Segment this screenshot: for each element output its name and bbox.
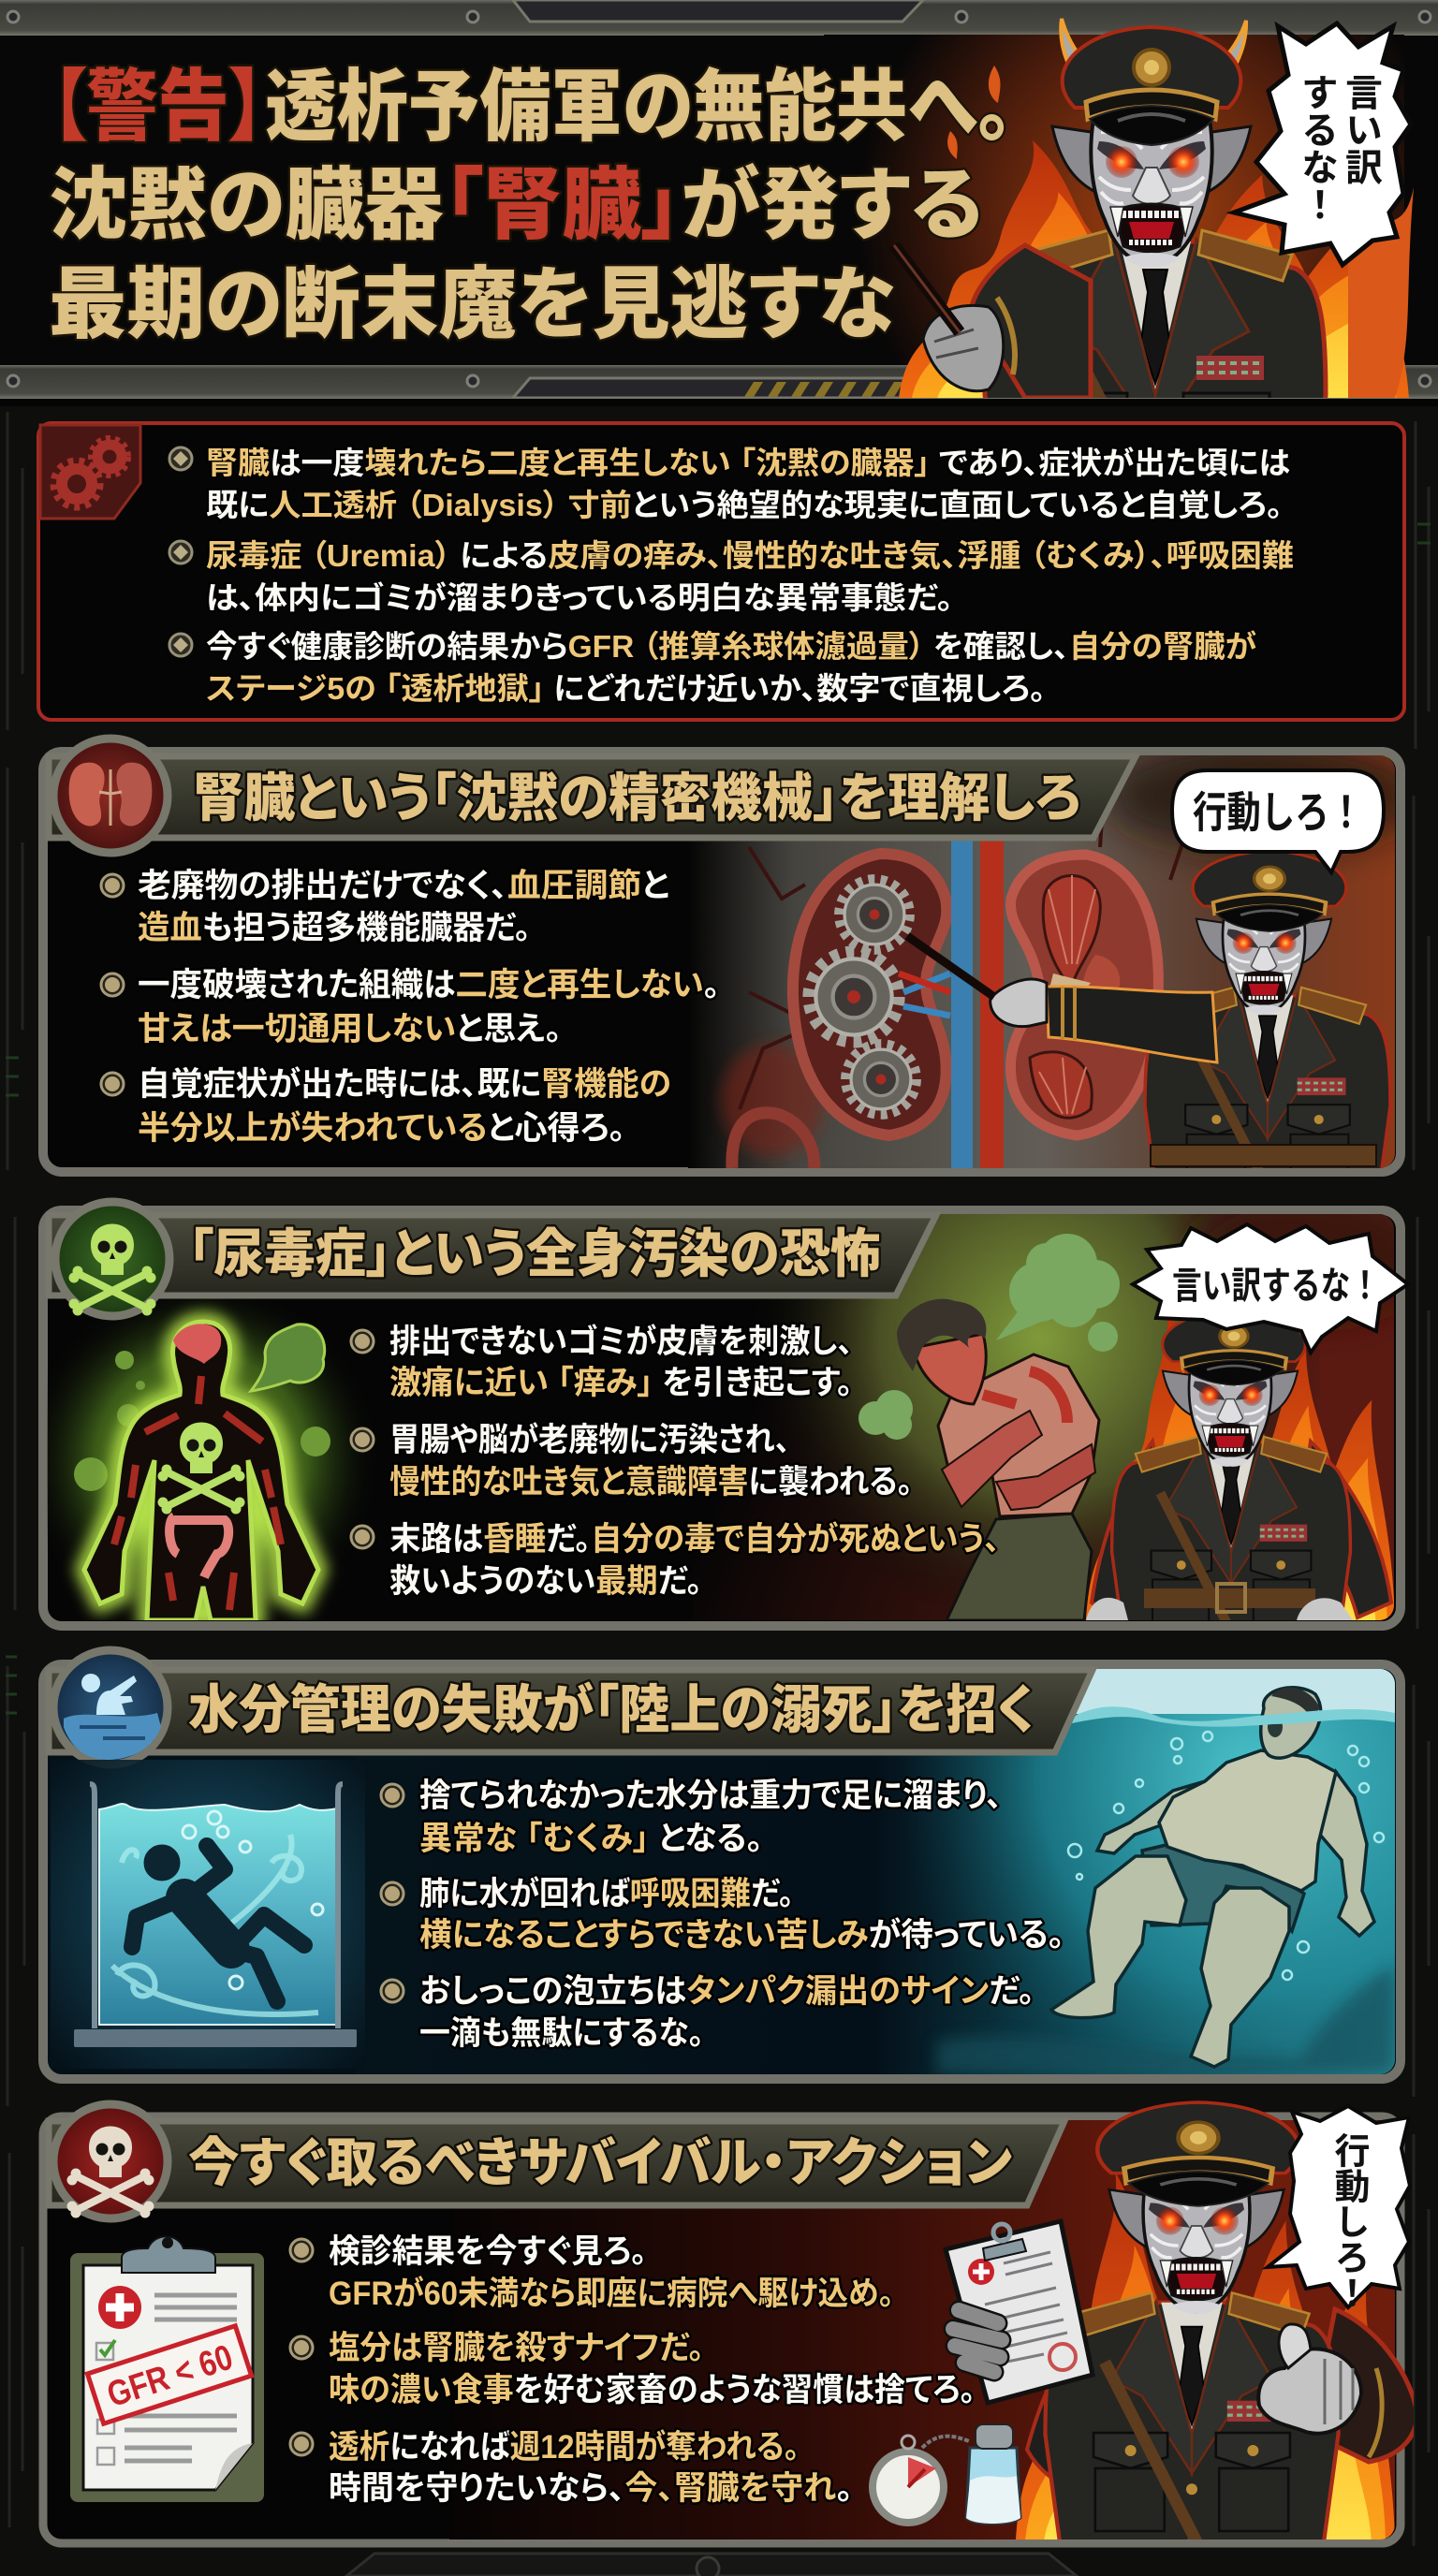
speech burst vertical <box>1268 2106 1410 2310</box>
bullets section 4: 透析になれば週12時間が奪われる。 <box>329 2429 800 2466</box>
bullets section 1: 自覚症状が出た時には、既に腎機能の <box>138 1066 671 1103</box>
speech burst: するな！ <box>1296 73 1337 223</box>
bullets section 4: GFRが60未満なら即座に病院へ駆け込め。 <box>329 2276 894 2312</box>
header title: 最期の断末魔を見逃すな <box>49 260 895 348</box>
bullet text 2 <box>169 538 1294 615</box>
officer body <box>1024 2291 1414 2539</box>
bullets section 3: おしっこの泡立ちはタンパク漏出のサインだ。 <box>419 1973 1034 2010</box>
header title <box>49 63 1013 348</box>
bullets section 2: 慢性的な吐き気と意識障害に襲われる。 <box>389 1464 913 1500</box>
speech bubble <box>1172 770 1384 872</box>
bullets section 4: 味の濃い食事を好む家畜のような習慣は捨てろ。 <box>329 2372 976 2408</box>
illustration: clipboard with GFR stamp <box>70 2236 264 2502</box>
bullet text 2: 尿毒症 （Uremia） による皮膚の痒み、慢性的な吐き気、浮腫 （むくみ）、呼吸困難 <box>206 538 1294 573</box>
header band: 「尿毒症」という全身汚染の恐怖 <box>188 1224 881 1283</box>
bullets section 3: 異常な 「むくみ」 となる。 <box>419 1821 763 1857</box>
panel: summary warning <box>38 423 1404 720</box>
pipes <box>951 840 1004 1168</box>
icon: red skull <box>53 2104 168 2218</box>
illustration: broken kidney machine <box>688 739 1423 1168</box>
bullets section 1 <box>101 868 720 1147</box>
speech burst: 言い訳するな！ <box>1172 1266 1380 1307</box>
illustration: toxic body <box>74 1322 330 1620</box>
head <box>1097 2102 1299 2313</box>
bullets section 2: 激痛に近い 「痒み」 を引き起こす。 <box>389 1365 853 1401</box>
bullet text 1 <box>169 446 1290 522</box>
bottom metal bar <box>0 365 1438 406</box>
bullets section 1: 甘えは一切通用しないと思え。 <box>138 1011 562 1047</box>
speech bubble: 行動しろ！ <box>1193 788 1363 837</box>
panel: section 2 uremia <box>38 1198 1405 1631</box>
bullet text 2: は、体内にゴミが溜まりきっている明白な異常事態だ。 <box>206 580 953 615</box>
icon: gears tab <box>40 425 140 519</box>
head <box>1052 27 1251 267</box>
header band: 水分管理の失敗が「陸上の溺死」を招く <box>188 1680 1034 1739</box>
icon: swimmer <box>53 1650 168 1764</box>
bullet text 3: ステージ5の 「透析地獄」 にどれだけ近いか、数字で直視しろ。 <box>206 671 1046 706</box>
pointing fist <box>1258 2324 1361 2434</box>
icon: stopwatch <box>873 2436 969 2523</box>
bullets section 3: 横になることすらできない苦しみが待っている。 <box>419 1917 1064 1954</box>
officer with clipboard <box>946 2102 1417 2576</box>
illustration: drowning man <box>899 1669 1395 2074</box>
torso <box>983 228 1328 398</box>
header banner <box>0 0 1438 406</box>
header band <box>49 2121 1064 2205</box>
officer with baton <box>904 854 1392 1168</box>
icon: kidneys <box>53 739 168 853</box>
kidney left with gears <box>793 854 950 1135</box>
illustration background <box>47 1189 1432 1620</box>
illustration: water tank <box>51 1760 365 2069</box>
toxic smoke <box>858 1234 1120 1440</box>
bullets section 4 <box>290 2233 976 2507</box>
bullets section 4: 時間を守りたいなら、今、腎臓を守れ。 <box>329 2470 853 2507</box>
arm and fist <box>894 245 1091 398</box>
bullet text 1: 既に人工透析 （Dialysis） 寸前 という絶望的な現実に直面していると自覚しろ。 <box>206 488 1283 522</box>
panel: section 1 kidney machine <box>38 734 1405 1177</box>
header band <box>49 1215 936 1295</box>
icon: green skull <box>55 1202 169 1316</box>
officer with flames <box>1086 1320 1394 1620</box>
panel: section 3 water <box>43 1650 1401 2079</box>
kidney right <box>1010 855 1158 1135</box>
bullets section 4: 検診結果を今すぐ見ろ。 <box>329 2233 647 2270</box>
bullets section 3: 肺に水が回れば呼吸困難だ。 <box>419 1876 794 1912</box>
illustration: fire background <box>449 2120 1395 2539</box>
panel: section 4 action <box>43 2102 1417 2576</box>
bullet text 3 <box>169 629 1256 706</box>
bullets section 1: 造血も担う超多機能臓器だ。 <box>138 910 531 946</box>
header title: 沈黙の臓器「腎臓」が発する <box>49 161 983 249</box>
speech burst <box>1133 1224 1408 1353</box>
held document <box>946 2221 1093 2403</box>
header title: 【警告】透析予備軍の無能共へ。 <box>51 63 1013 151</box>
horns <box>1059 19 1249 64</box>
bullets section 1: 老廃物の排出だけでなく、血圧調節と <box>138 868 669 904</box>
bullets section 3 <box>381 1778 1064 2052</box>
header band <box>49 1670 1093 1752</box>
bullets section 2 <box>351 1323 1000 1600</box>
bullets section 2: 末路は昏睡だ。自分の毒で自分が死ぬという、 <box>389 1521 1000 1558</box>
bullets section 4: 塩分は腎臓を殺すナイフだ。 <box>329 2330 704 2366</box>
header flames and glow <box>824 35 1414 399</box>
body <box>1051 1688 1374 2067</box>
speech burst vertical: 行動しろ！ <box>1328 2132 1370 2310</box>
icon: salt shaker <box>966 2424 1020 2524</box>
bullets section 3: 捨てられなかった水分は重力で足に溜まり、 <box>419 1778 1002 1814</box>
illustration: suffering man <box>858 1234 1120 1620</box>
header band <box>49 756 1136 838</box>
speech burst: 言い訳 <box>1340 73 1382 185</box>
bullets section 2: 救いようのない最期だ。 <box>389 1563 702 1600</box>
top metal bar <box>0 0 1438 36</box>
footer ornament <box>346 2554 1077 2576</box>
speech burst <box>1234 23 1411 265</box>
header band: 今すぐ取るべきサバイバル・アクション <box>188 2133 1012 2192</box>
header band: 腎臓という「沈黙の精密機械」を理解しろ <box>193 768 1080 827</box>
left hand <box>953 2310 1002 2372</box>
bullets section 1: 半分以上が失われていると心得ろ。 <box>138 1110 625 1147</box>
bullets section 2: 排出できないゴミが皮膚を刺激し、 <box>389 1323 853 1360</box>
bullet text 3: 今すぐ健康診断の結果からGFR （推算糸球体濾過量） を確認し、自分の腎臓が <box>206 629 1256 664</box>
officer pointing baton <box>894 19 1326 582</box>
bullets section 2: 胃腸や脳が老廃物に汚染され、 <box>389 1422 790 1458</box>
bullets section 3: 一滴も無駄にするな。 <box>419 2015 704 2052</box>
bullets section 1: 一度破壊された組織は二度と再生しない。 <box>138 967 720 1003</box>
illustration: clipboard with GFR stamp: GFR < 60 <box>103 2338 238 2415</box>
bullet text 1: 腎臓は一度壊れたら二度と再生しない 「沈黙の臓器」 であり、症状が出た頃には <box>206 446 1290 480</box>
